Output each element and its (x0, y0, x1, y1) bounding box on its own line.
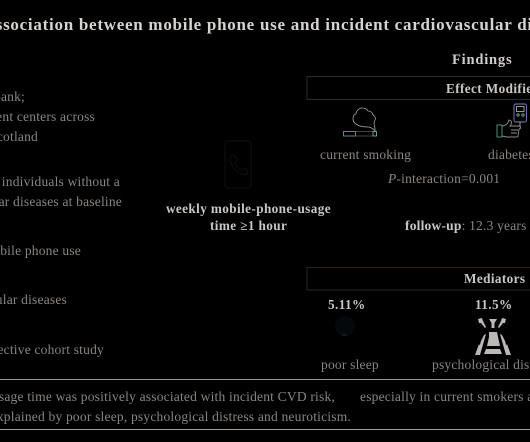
panel: mediators header (307, 268, 530, 290)
text: exposure label (166, 201, 331, 233)
panel: conclusion (0, 380, 530, 430)
panel: study design (0, 89, 122, 357)
icon: poor sleep (335, 316, 355, 336)
icon: cigarette smoke (344, 108, 376, 136)
panel: effect modifiers header (307, 76, 530, 100)
text: p-interaction: P-interaction=0.001 (387, 171, 500, 186)
stat: psychological distress share: 11.5% (475, 297, 513, 312)
text: follow-up: follow-up: 12.3 years (405, 218, 527, 233)
text: exposure label: time ≥1 hour (210, 218, 287, 233)
heading: findings: Findings (452, 52, 512, 68)
icon: glucose meter in hand (497, 104, 526, 137)
text: exposure label: weekly mobile-phone-usage (166, 201, 331, 216)
panel: mediators header: Mediators (464, 271, 525, 286)
text: conclusion line 1 (0, 389, 530, 404)
text: poor sleep: poor sleep (321, 357, 379, 372)
text: data source (0, 89, 95, 144)
text: current smoking: current smoking (320, 147, 411, 162)
icon: mobile phone (225, 141, 251, 188)
text: population (0, 174, 122, 209)
icon: psychological distress (475, 318, 511, 355)
stat: poor sleep share: 5.11% (328, 297, 366, 312)
